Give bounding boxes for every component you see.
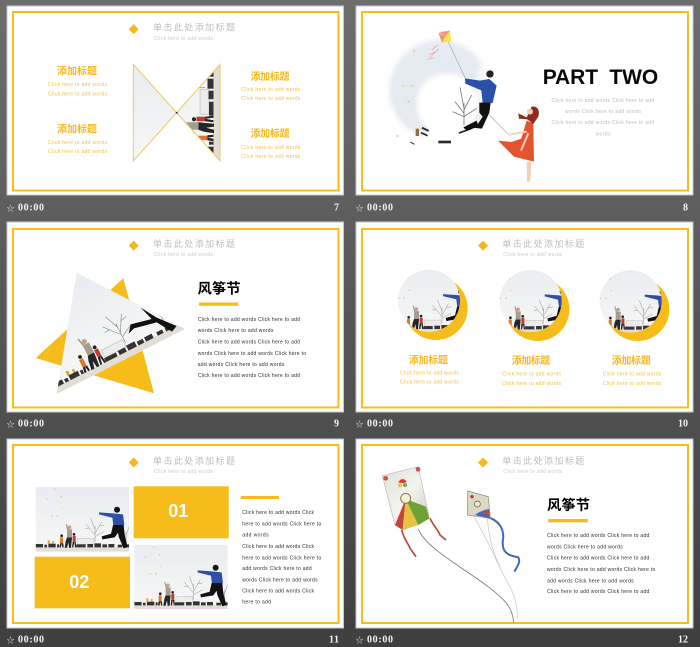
text block: slide 11: words Click here to add words bbox=[242, 577, 318, 583]
block 01 bbox=[134, 486, 229, 538]
text block: bottom right: 添加标题 bbox=[250, 127, 290, 140]
text block: part two bbox=[552, 98, 654, 138]
text block: column 1: Click here to add words bbox=[400, 380, 459, 386]
heading: slide 9: Click here to add words bbox=[154, 252, 214, 258]
footer: slide 8 bbox=[356, 202, 688, 214]
yellow triangle bbox=[36, 278, 154, 393]
heading: slide 7: 单击此处添加标题 bbox=[153, 22, 235, 32]
footer: slide 7: 00:00 bbox=[18, 202, 44, 214]
heading: slide 10 bbox=[478, 238, 584, 258]
panel: slide 7 bbox=[7, 6, 344, 195]
text block: top left bbox=[48, 64, 108, 98]
text block: slide 9 bbox=[198, 317, 306, 379]
tree bbox=[453, 87, 477, 125]
panel: slide 12 bbox=[356, 439, 693, 628]
block 02: 02 bbox=[69, 572, 89, 592]
text block: bottom left: Click here to add words bbox=[48, 140, 108, 146]
text block: slide 9: words Click here to add words Click here to bbox=[198, 351, 306, 357]
footer: slide 11: 00:00 bbox=[18, 634, 44, 646]
heading: slide 12: Click here to add words bbox=[503, 469, 563, 475]
title: kite festival: 风筝节 bbox=[547, 496, 590, 514]
heading: slide 11: 单击此处添加标题 bbox=[153, 455, 235, 466]
heading: PART TWO: PART TWO bbox=[543, 66, 658, 89]
footer: slide 10: 10 bbox=[678, 418, 688, 430]
text block: top right: 添加标题 bbox=[250, 70, 290, 83]
photo 2 bbox=[134, 545, 228, 610]
heading: slide 9 bbox=[129, 238, 235, 258]
title: kite festival: 风筝节 bbox=[198, 280, 240, 298]
footer: slide 7 bbox=[6, 202, 339, 214]
heading: slide 12 bbox=[478, 455, 584, 475]
footer: slide 9 bbox=[6, 418, 339, 430]
text block: column 2: 添加标题 bbox=[512, 354, 550, 367]
photo triangle bbox=[56, 273, 185, 394]
kite string bbox=[448, 41, 509, 135]
text block: column 2: Click here to add words bbox=[502, 372, 562, 378]
footer: slide 10 bbox=[356, 418, 688, 430]
illustration: kite flyers bbox=[389, 31, 539, 182]
footer: slide 11 bbox=[6, 634, 339, 646]
block 01: 01 bbox=[168, 501, 188, 521]
heading: slide 11 bbox=[129, 455, 235, 475]
text block: slide 9: add words Click here to add words bbox=[198, 362, 285, 368]
text block: part two: words Click here to add words bbox=[565, 109, 642, 115]
photo 1 bbox=[36, 487, 129, 552]
footer: slide 11: 11 bbox=[329, 634, 339, 646]
text block: slide 12 bbox=[547, 533, 656, 595]
text block: slide 11: here to add bbox=[242, 600, 271, 606]
text block: top right: Click here to add words bbox=[241, 87, 301, 93]
text block: slide 9: words Click here to add words bbox=[198, 328, 274, 334]
text block: column 1 bbox=[400, 353, 459, 386]
text block: column 3 bbox=[603, 354, 662, 387]
text block: slide 12: words Click here to add words Click here to bbox=[547, 567, 656, 573]
text block: column 3: Click here to add words bbox=[603, 372, 662, 378]
heading: slide 10: 单击此处添加标题 bbox=[502, 238, 584, 249]
footer: slide 8: 00:00 bbox=[367, 202, 393, 214]
footer: slide 9: 9 bbox=[334, 418, 339, 430]
text block: slide 12: words Click here to add words bbox=[547, 544, 623, 550]
panel: slide 9 bbox=[7, 222, 344, 412]
scattered birds and village bbox=[396, 49, 472, 145]
red kite bbox=[427, 31, 451, 59]
footer: slide 7: ☆ bbox=[6, 204, 14, 213]
small kite bbox=[467, 491, 519, 618]
text block: column 2 bbox=[502, 354, 562, 387]
text block: top left: 添加标题 bbox=[57, 64, 97, 78]
text block: column 3: 添加标题 bbox=[612, 354, 651, 367]
text block: slide 12: Click here to add words Click here to add bbox=[547, 556, 650, 562]
text block: column 2: Click here to add words bbox=[502, 381, 562, 387]
text block: top right bbox=[241, 70, 301, 102]
text block: slide 11 bbox=[242, 510, 322, 606]
footer: slide 10: ☆ bbox=[356, 420, 364, 429]
footer: slide 10: 00:00 bbox=[367, 418, 393, 430]
text block: part two: Click here to add words Click here to add bbox=[552, 120, 654, 126]
text block: bottom left: 添加标题 bbox=[57, 122, 97, 136]
text block: slide 9: Click here to add words Click here to add bbox=[198, 373, 300, 379]
swirl ring bbox=[389, 40, 497, 157]
footer: slide 8: ☆ bbox=[356, 204, 364, 213]
text block: column 1: Click here to add words bbox=[400, 370, 459, 376]
text block: bottom right bbox=[241, 127, 301, 160]
accent bar bbox=[241, 496, 279, 499]
footer: slide 9: ☆ bbox=[6, 420, 14, 429]
text block: slide 11: add words Click here to add bbox=[242, 566, 312, 572]
accent bar bbox=[199, 302, 238, 306]
text block: part two: words bbox=[596, 132, 611, 138]
circle image 3 bbox=[600, 270, 670, 341]
text block: slide 11: Click here to add words Click bbox=[242, 510, 314, 516]
text block: column 1: 添加标题 bbox=[409, 353, 448, 366]
text block: bottom left bbox=[48, 122, 108, 155]
illustration: two kites bbox=[382, 467, 519, 623]
footer: slide 12: ☆ bbox=[356, 636, 364, 645]
text block: slide 11: add words bbox=[242, 533, 269, 539]
panel: slide 10 bbox=[356, 222, 693, 412]
footer: slide 12: 12 bbox=[678, 634, 688, 646]
heading: slide 12: 单击此处添加标题 bbox=[502, 455, 584, 466]
text block: slide 11: Click here to add words Click bbox=[242, 544, 314, 550]
text block: bottom right: Click here to add words bbox=[241, 145, 301, 151]
text block: slide 12: add words Click here to add words bbox=[547, 578, 634, 584]
text block: bottom right: Click here to add words bbox=[241, 154, 301, 160]
text block: slide 11: here to add words Click here to bbox=[242, 555, 322, 561]
footer: slide 7: 7 bbox=[334, 202, 339, 214]
text block: part two: Click here to add words Click here to add bbox=[552, 98, 654, 104]
heading: slide 9: 单击此处添加标题 bbox=[153, 238, 235, 249]
footer: slide 11: ☆ bbox=[6, 636, 14, 645]
text block: bottom left: Click here to add words bbox=[48, 149, 108, 155]
text block: slide 12: Click here to add words Click here to add bbox=[547, 533, 650, 539]
block 02 bbox=[35, 557, 130, 608]
text block: slide 9: Click here to add words Click here to add bbox=[198, 317, 300, 323]
text block: slide 11: Click here to add words Click bbox=[242, 588, 314, 594]
man bbox=[463, 70, 497, 131]
footer: slide 8: 8 bbox=[683, 202, 688, 214]
text block: slide 9: Click here to add words Click here to add bbox=[198, 340, 300, 346]
circle image 2 bbox=[500, 270, 570, 341]
text block: slide 11: here to add words Click here to bbox=[242, 521, 322, 527]
heading: slide 10: Click here to add words bbox=[503, 252, 563, 258]
panel: slide 8 bbox=[356, 6, 693, 195]
panel: slide 11 bbox=[7, 439, 344, 628]
circle image 1 bbox=[398, 270, 468, 340]
accent bar bbox=[548, 519, 588, 522]
text block: column 3: Click here to add words bbox=[603, 381, 662, 387]
text block: slide 12: Click here to add words Click here to add bbox=[547, 589, 650, 595]
bow-tie image bbox=[132, 63, 220, 162]
large kite bbox=[382, 467, 514, 623]
heading: slide 11: Click here to add words bbox=[154, 469, 214, 475]
girl bbox=[498, 106, 539, 182]
text block: top left: Click here to add words bbox=[48, 82, 108, 88]
footer: slide 12: 00:00 bbox=[367, 634, 393, 646]
text block: top left: Click here to add words bbox=[48, 92, 108, 98]
text block: top right: Click here to add words bbox=[241, 96, 301, 102]
heading: slide 7 bbox=[129, 22, 235, 42]
footer: slide 12 bbox=[356, 634, 688, 646]
heading: slide 7: Click here to add words bbox=[154, 36, 214, 42]
footer: slide 9: 00:00 bbox=[18, 418, 44, 430]
